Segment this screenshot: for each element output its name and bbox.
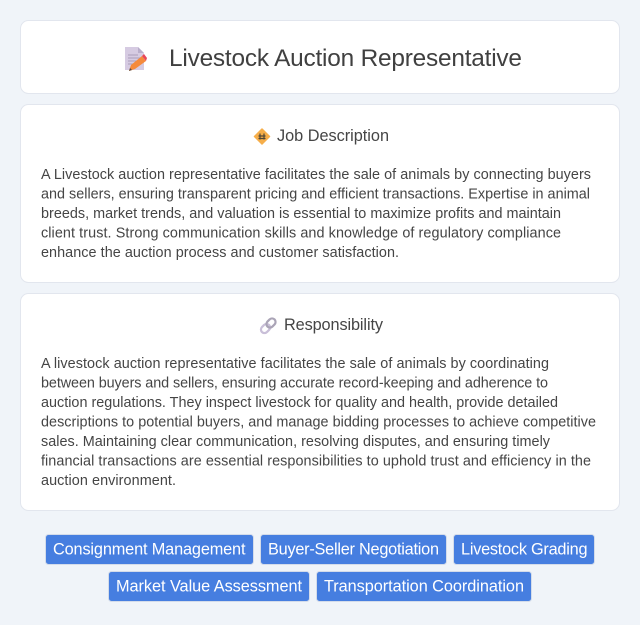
tag: livestock grading <box>454 534 594 564</box>
tag: transportation coordination: Transportation Coordination <box>324 578 524 596</box>
text block: job description: A Livestock auction representative facilitates the sale of animals by connecting buyers <box>41 167 591 183</box>
icon: document with pencil <box>125 47 147 71</box>
tag: transportation coordination <box>316 572 532 602</box>
panel: title <box>20 20 620 94</box>
text block: responsibility: financial transactions are essential responsibilities to uphold trust and efficiency in the <box>41 454 591 470</box>
text block: job description <box>41 167 591 261</box>
panel: responsibility <box>20 294 620 510</box>
text block: job description: client trust. Strong communication skills and knowledge of regulatory compliance <box>41 226 561 242</box>
tag: consignment management <box>46 534 254 564</box>
text block: responsibility: descriptions to potential buyers, and manage bidding processes to achieve competitive <box>41 414 596 430</box>
title text: Livestock Auction Representative <box>169 45 522 72</box>
heading: responsibility: Responsibility <box>284 316 384 334</box>
tag: market value assessment <box>108 572 310 602</box>
icon: chain link <box>259 317 277 335</box>
text block: job description: breeds, market trends, and valuation is essential to maximize profits and maintain <box>41 206 561 222</box>
heading: job description: Job Description <box>277 127 389 145</box>
text block: responsibility: between buyers and sellers, ensuring accurate record-keeping and adherence to <box>41 376 548 392</box>
text block: responsibility: auction regulations. They inspect livestock for quality and health, provide detailed <box>41 395 558 411</box>
text block: responsibility: auction environment. <box>41 473 176 489</box>
tag: buyer-seller negotiation: Buyer-Seller Negotiation <box>268 540 439 558</box>
tag: buyer-seller negotiation <box>260 534 446 564</box>
text block: responsibility: sales. Maintaining clear communication, resolving disputes, and ensuring timely <box>41 434 551 450</box>
text block: job description: enhance the auction process and customer satisfaction. <box>41 245 399 261</box>
text block: responsibility: A livestock auction representative facilitates the sale of animals by coordinating <box>41 356 549 372</box>
tag: livestock grading: Livestock Grading <box>461 540 588 558</box>
panel: job description <box>20 104 620 282</box>
icon: diamond sign <box>254 129 270 144</box>
tag: market value assessment: Market Value Assessment <box>116 578 302 596</box>
text block: responsibility <box>41 356 596 489</box>
tag: consignment management: Consignment Management <box>53 540 246 558</box>
text block: job description: and sellers, ensuring transparent pricing and efficient transactions. Expertise in animal <box>41 186 590 202</box>
skill tags <box>46 534 594 602</box>
